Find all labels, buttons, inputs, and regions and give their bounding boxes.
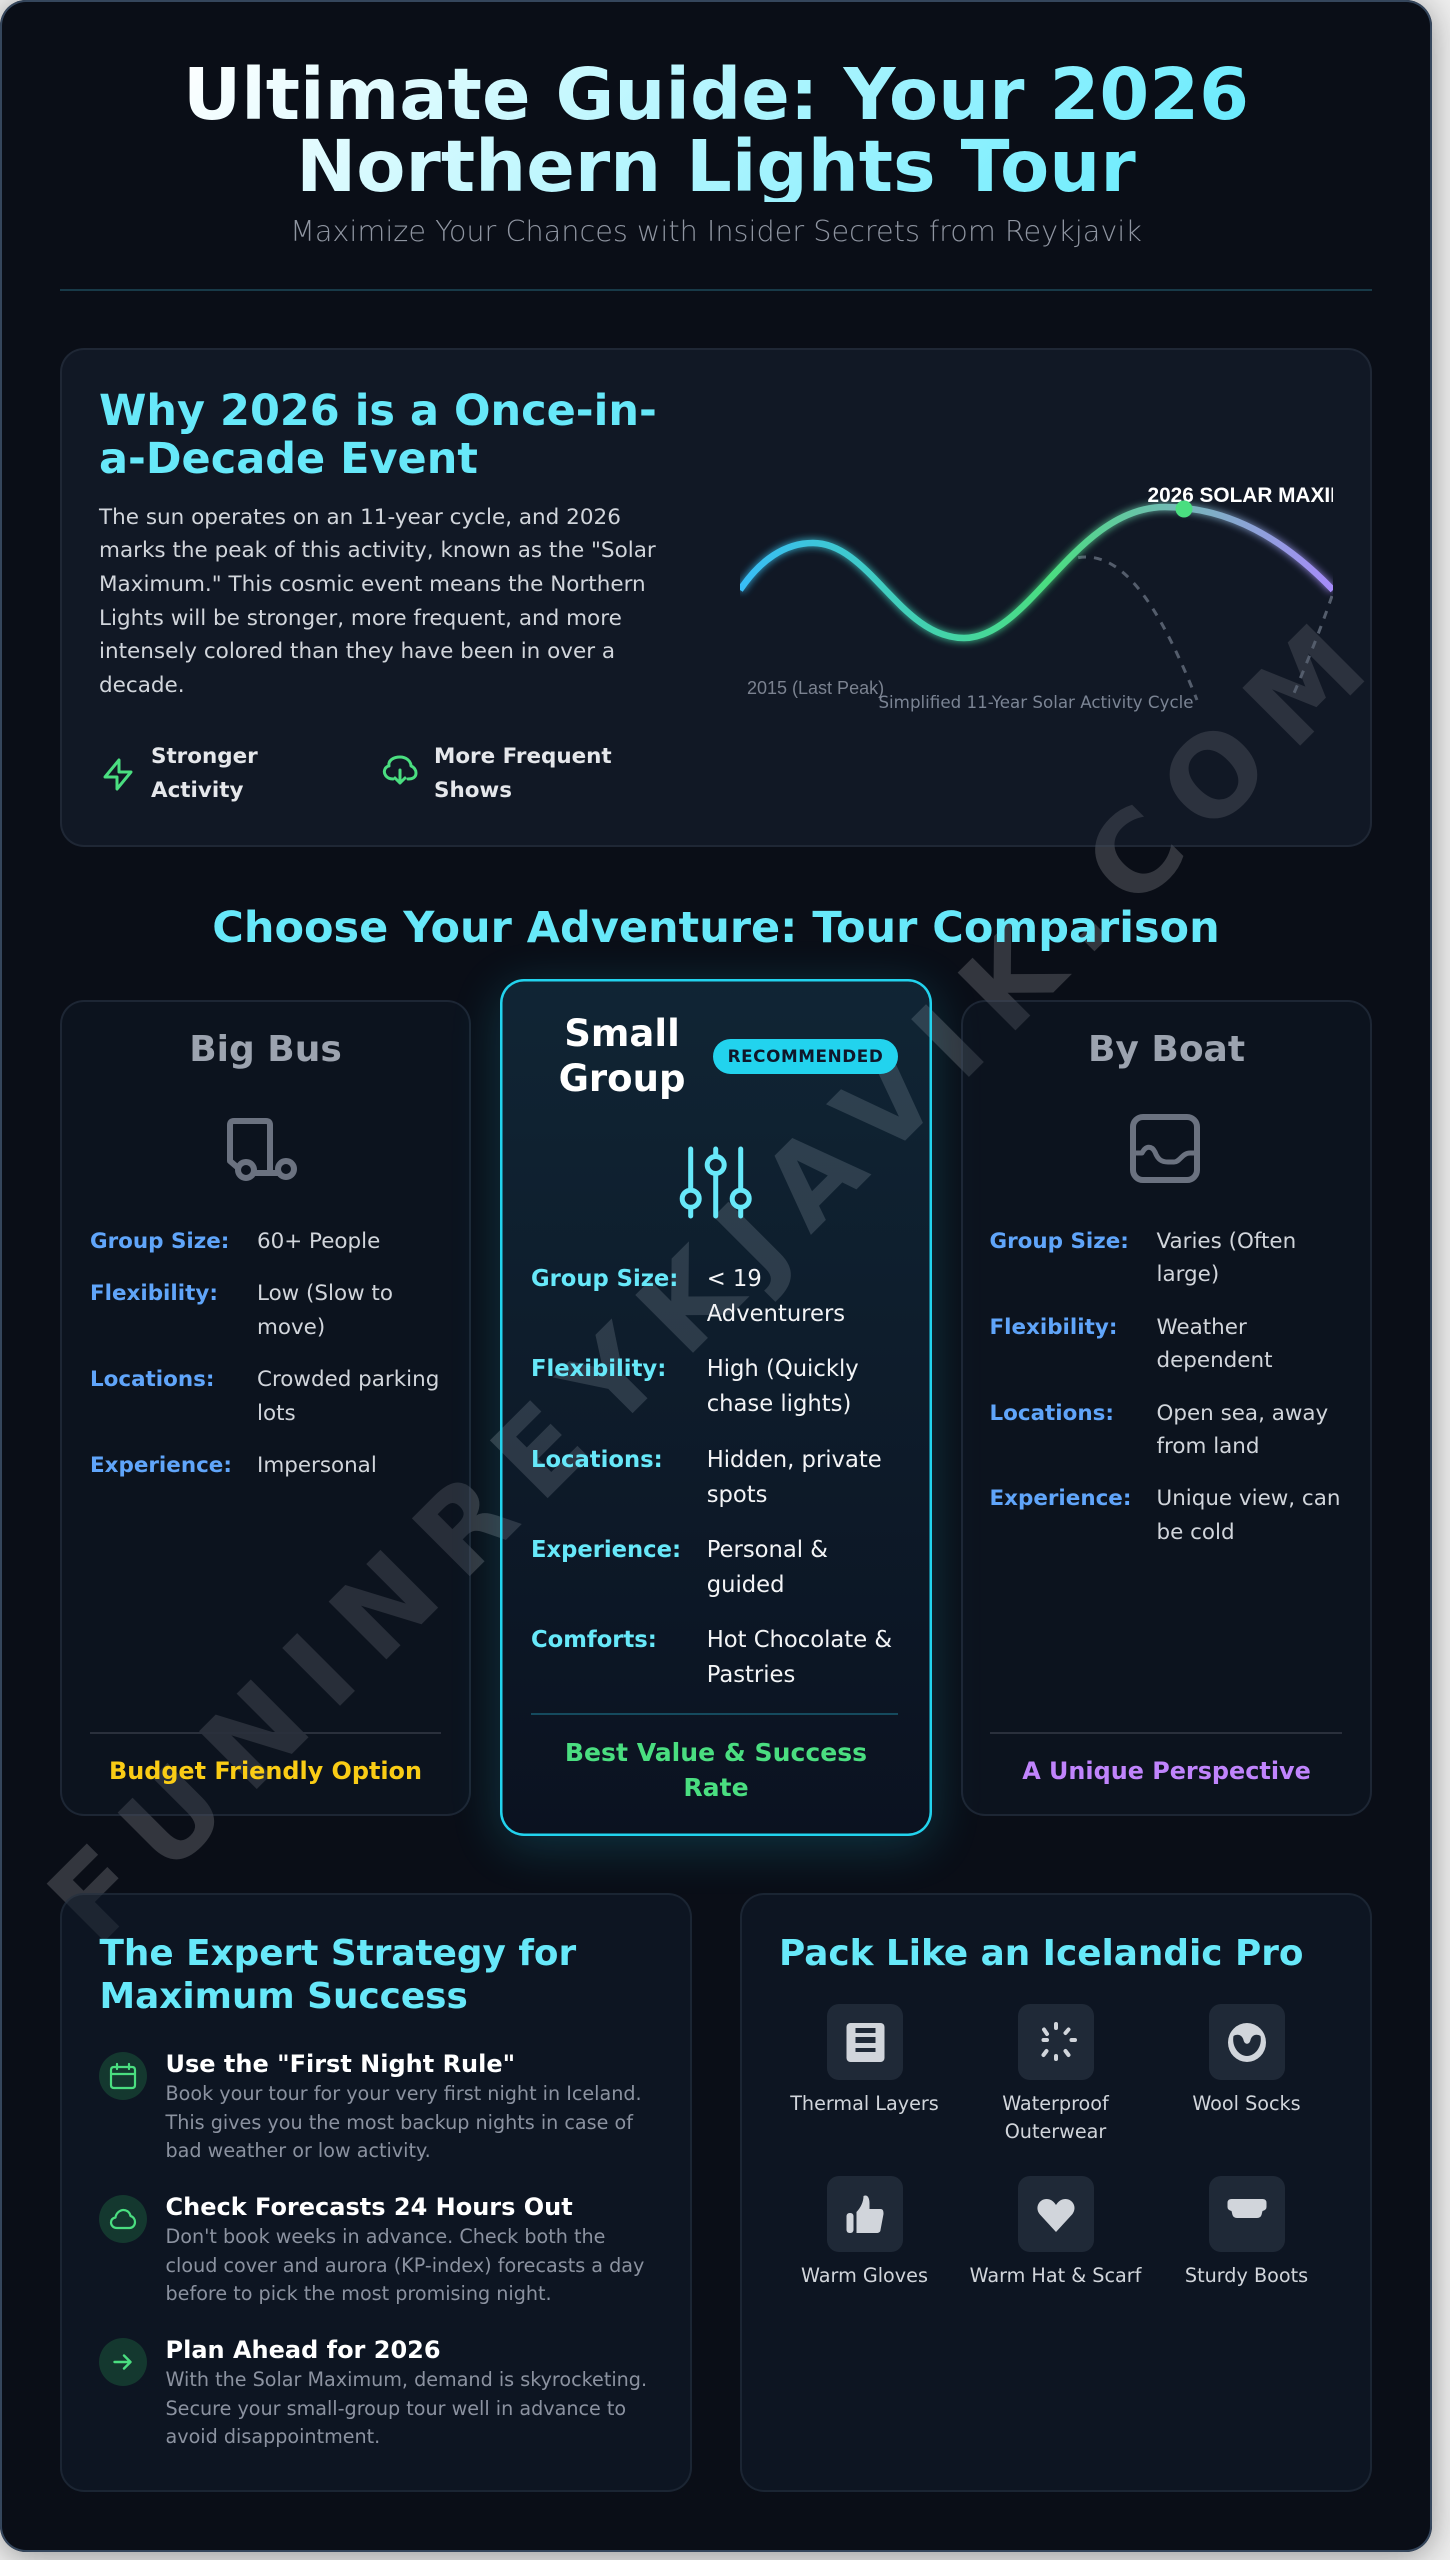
step text: With the Solar Maximum, demand is skyrocketing. [166,2368,647,2391]
heading: expert strategy: Maximum Success [100,1976,468,2017]
row: comforts: Comforts: [531,1627,657,1653]
row: group size [531,1266,845,1327]
icon: boat waves [1130,1114,1200,1183]
row: group size: Group Size: [90,1229,229,1254]
row: experience [990,1486,1340,1545]
item: warm hat and scarf [970,2176,1142,2286]
step title: Check Forecasts 24 Hours Out [166,2193,573,2221]
step text: before to pick the most promising night. [166,2282,552,2305]
badge: recommended [713,1039,898,1074]
step text [166,2368,647,2448]
row: experience [90,1453,377,1478]
item: wool socks [1192,2004,1301,2114]
row: locations: Crowded parking [257,1367,439,1392]
step text: Secure your small-group tour well in advance to [166,2397,626,2420]
subtitle: Maximize Your Chances with Insider Secrets from Reykjavik [290,214,1142,248]
row: experience: Personal & [707,1537,828,1563]
label: Waterproof [1002,2092,1109,2114]
chart: solar activity cycle: Simplified 11-Year Solar Activity Cycle [878,692,1194,712]
item: warm gloves [801,2176,928,2286]
row: flexibility: Low (Slow to [257,1281,393,1306]
icon: sock [1208,2004,1284,2080]
title: Ultimate Guide: Your 2026 [183,52,1249,136]
text: solar maximum explanation [98,505,656,698]
heading: packing list: Pack Like an Icelandic Pro [779,1933,1303,1974]
step text: cloud cover and aurora (KP-index) forecasts a day [166,2254,644,2277]
badge: recommended: RECOMMENDED [728,1046,883,1066]
row: flexibility [90,1281,393,1340]
panel: big bus [60,1000,471,1816]
label: Sturdy Boots [1185,2264,1308,2286]
title [176,58,1256,202]
heading: tour comparison: Choose Your Adventure: Tour Comparison [212,903,1220,953]
row: flexibility: move) [257,1315,325,1340]
row: locations: spots [707,1482,767,1508]
item: thermal layers [790,2004,939,2114]
chart: solar activity cycle: 2015 (Last Peak) [747,678,884,698]
row: locations [90,1367,439,1426]
row: group size: Adventurers [707,1301,845,1327]
icon: spinner drops [1018,2004,1094,2080]
heading: big bus: Big Bus [189,1029,342,1070]
label: Thermal Layers [790,2092,939,2114]
step: plan ahead [99,2336,647,2448]
label: more frequent shows [434,744,612,803]
heading: by boat: By Boat [1088,1029,1245,1070]
icon: lightning bolt [104,758,132,791]
item: waterproof outerwear [1002,2004,1110,2143]
row: group size: 60+ People [257,1229,380,1254]
row: comforts: Hot Chocolate & [707,1627,892,1653]
row: experience: Experience: [990,1486,1131,1511]
row: group size: large) [1156,1262,1219,1287]
heading: why 2026: Why 2026 is a Once-in- [99,386,657,436]
label: more frequent shows: More Frequent [434,744,612,769]
step text [166,2225,644,2305]
text: solar maximum explanation: intensely colored than they have been in over a [99,639,615,664]
label: stronger activity [151,744,258,803]
panel: expert strategy [60,1893,692,2492]
row: flexibility: Weather [1156,1315,1247,1340]
heading: small group: Small [564,1012,680,1055]
step text: Don't book weeks in advance. Check both the [166,2225,605,2248]
footer: best value: Best Value & Success [565,1738,867,1767]
text: solar maximum explanation: The sun operates on an 11-year cycle, and 2026 [99,505,621,530]
row: locations: Locations: [531,1446,663,1472]
footer: best value: Rate [683,1773,749,1802]
row: locations: lots [257,1401,296,1426]
row: locations: from land [1156,1434,1260,1459]
label: stronger activity: Activity [151,778,243,803]
heading: expert strategy [100,1933,576,2017]
row: flexibility: Flexibility: [990,1315,1117,1340]
step title: Plan Ahead for 2026 [166,2336,441,2364]
icon: sliders [680,1146,752,1218]
row: group size [90,1229,380,1254]
icon: bus [227,1118,297,1181]
row: flexibility: High (Quickly [707,1356,859,1382]
footer: budget friendly: Budget Friendly Option [109,1757,422,1785]
row: flexibility: Flexibility: [531,1356,666,1382]
row: experience: Impersonal [257,1453,377,1478]
label: Warm Gloves [801,2264,928,2286]
heading: small group: Group [559,1057,685,1100]
row: flexibility [990,1315,1272,1373]
row: locations: Locations: [990,1400,1114,1426]
row: flexibility: dependent [1156,1348,1272,1373]
panel: why 2026 [60,348,1372,847]
icon: heart [1018,2176,1094,2252]
heading: small group [559,1012,685,1100]
row: locations: Hidden, private [707,1446,882,1472]
title: Northern Lights Tour [296,124,1136,208]
panel: small group [500,979,932,1836]
item: sturdy boots [1151,2176,1342,2291]
step text: bad weather or low activity. [166,2139,431,2162]
row: locations [990,1400,1328,1459]
row: group size: Group Size: [990,1229,1129,1254]
icon: calendar [99,2052,147,2100]
row: experience: Unique view, can [1156,1486,1340,1511]
row: locations: Open sea, away [1156,1400,1328,1426]
row: experience: guided [707,1572,784,1598]
label: Outerwear [1005,2120,1106,2143]
watermark: FUNINREYKJAVIK.COM [24,584,1408,1968]
row: flexibility: Flexibility: [90,1281,218,1306]
text: solar maximum explanation: Lights will be stronger, more frequent, and more [99,606,622,631]
chart: solar activity cycle [740,484,1333,712]
row: locations [531,1446,882,1508]
text: solar maximum explanation: Maximum." This cosmic event means the Northern [99,572,646,597]
icon: arrow [99,2338,147,2386]
step: first night rule [99,2050,642,2162]
heading: why 2026: a-Decade Event [99,434,478,484]
heading: expert strategy: The Expert Strategy for [100,1933,576,1974]
row: flexibility: chase lights) [707,1391,851,1417]
panel: packing list [740,1893,1372,2492]
row: group size: < 19 [707,1266,762,1292]
step text: avoid disappointment. [166,2425,380,2448]
footer: best value [565,1738,867,1802]
row: locations: Locations: [90,1367,214,1392]
heading: why 2026 [99,386,657,484]
row: comforts: Pastries [707,1662,795,1688]
label: Wool Socks [1192,2092,1301,2114]
row: group size: Group Size: [531,1266,678,1292]
text: solar maximum explanation: decade. [99,673,185,698]
row: comforts [531,1627,892,1688]
row: experience: be cold [1156,1520,1235,1545]
icon: cloud [99,2195,147,2243]
step: check forecasts [99,2193,644,2305]
step title: Use the "First Night Rule" [166,2050,515,2078]
footer: unique perspective: A Unique Perspective [1022,1757,1311,1785]
icon: layers [826,2004,902,2080]
label: more frequent shows: Shows [434,778,512,803]
label [1002,2092,1110,2143]
panel: by boat [961,1000,1372,1816]
row: experience: Experience: [90,1453,232,1478]
icon: boot [1208,2176,1284,2252]
text: solar maximum explanation: marks the peak of this activity, known as the "Solar [99,538,656,563]
feature: more frequent shows [382,744,612,803]
row: group size [990,1229,1296,1287]
feature: stronger activity [104,744,258,803]
row: experience [531,1537,828,1598]
step text: Book your tour for your very first night in Iceland. [166,2082,642,2105]
step text: This gives you the most backup nights in case of [166,2111,633,2134]
step text [165,2082,642,2162]
row: flexibility [531,1356,859,1417]
label: Warm Hat & Scarf [970,2264,1141,2286]
label: stronger activity: Stronger [151,744,258,769]
icon: thumbs up [826,2176,902,2252]
icon: cloud download [382,756,418,785]
row: experience: Experience: [531,1537,681,1563]
row: group size: Varies (Often [1156,1229,1296,1254]
